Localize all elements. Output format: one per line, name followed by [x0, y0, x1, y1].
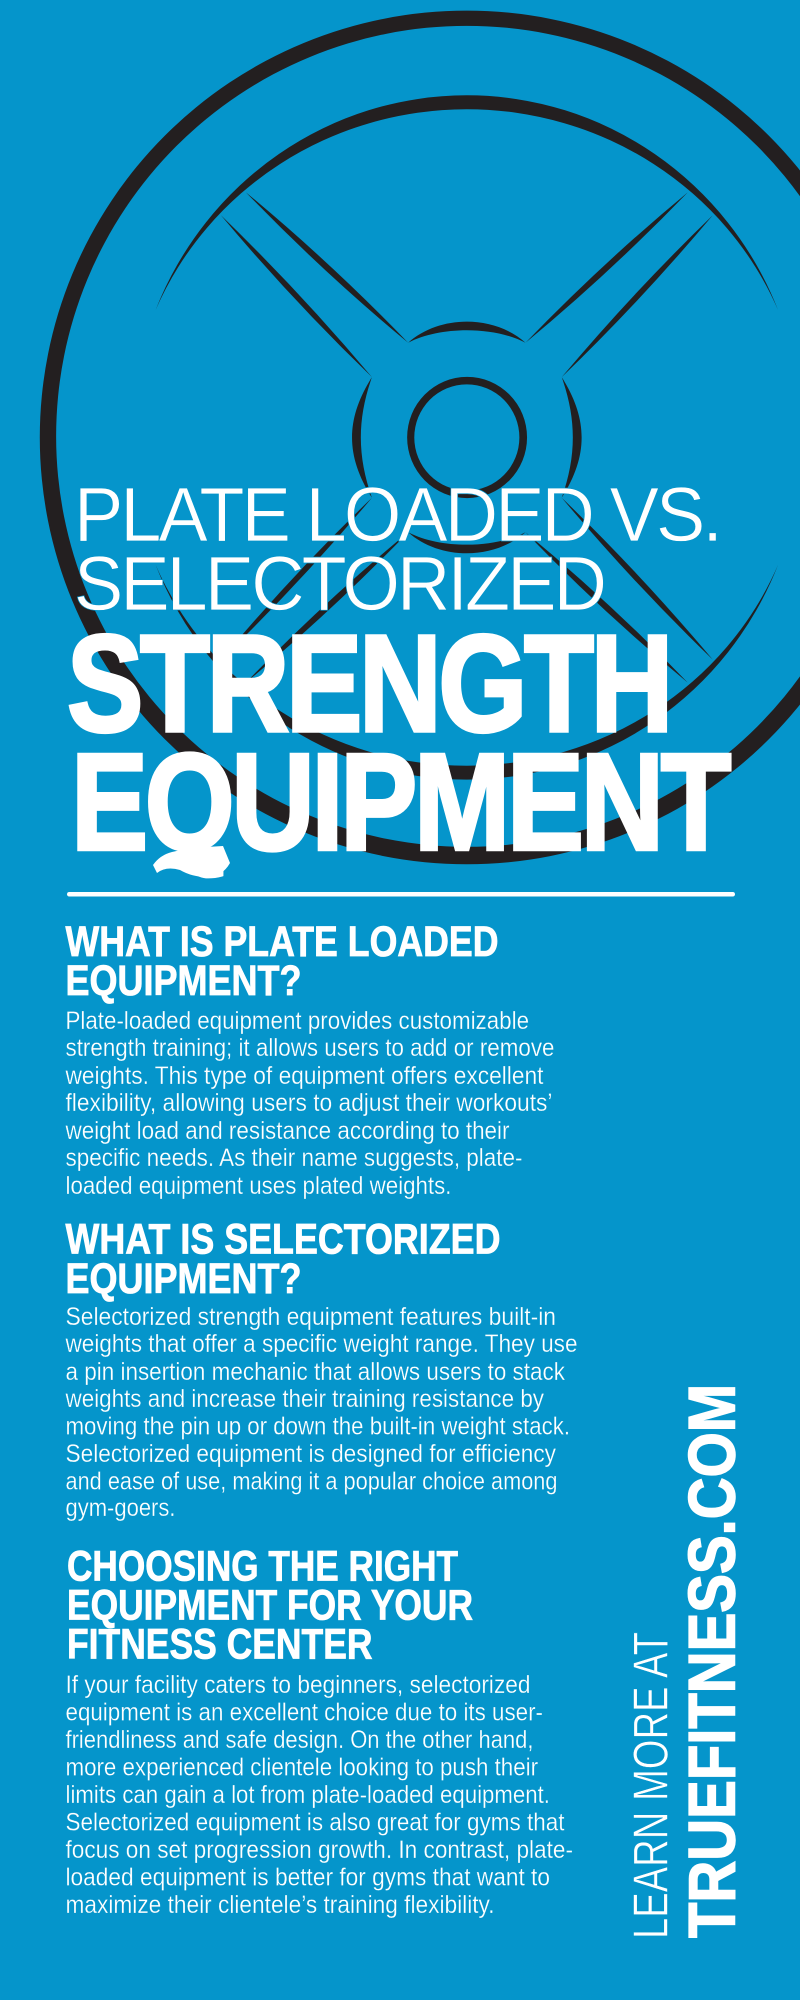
- body text: limits can gain a lot from plate-loaded equipment.: [66, 1781, 550, 1809]
- heading: EQUIPMENT?: [66, 1255, 302, 1303]
- body text: [65, 1303, 577, 1522]
- icon: weight plate illustration: [40, 11, 800, 864]
- body text: more experienced clientele looking to push their: [66, 1754, 538, 1782]
- section: what is plate loaded equipment: [65, 918, 554, 1200]
- body text: weights. This type of equipment offers excellent: [65, 1062, 544, 1090]
- heading: WHAT IS PLATE LOADED: [66, 918, 498, 966]
- body text: and ease of use, making it a popular choice among: [66, 1468, 558, 1496]
- body text: Selectorized equipment is designed for efficiency: [66, 1440, 556, 1468]
- hub arcs: [352, 322, 582, 553]
- hub centre ring: [407, 377, 527, 498]
- spokes: [221, 192, 713, 683]
- body text: weight load and resistance according to their: [65, 1117, 510, 1145]
- heading: FITNESS CENTER: [67, 1620, 372, 1668]
- body text: maximize their clientele’s training flexibility.: [66, 1891, 494, 1919]
- body text: [66, 1671, 573, 1919]
- title line: strength equipment: STRENGTH: [67, 607, 670, 761]
- body text: strength training; it allows users to add or remove: [66, 1034, 554, 1062]
- section: choosing the right equipment: [66, 1542, 573, 1919]
- outer plate rim: [40, 11, 800, 864]
- body text: focus on set progression growth. In contrast, plate-: [66, 1836, 573, 1864]
- body text: gym-goers.: [66, 1494, 176, 1522]
- body text: Selectorized equipment is also great for gyms that: [66, 1808, 565, 1836]
- body text: flexibility, allowing users to adjust their workouts’: [66, 1089, 552, 1117]
- title line: strength equipment: [67, 607, 730, 880]
- title line: plate loaded vs. selectorized: PLATE LOADED VS.: [74, 472, 720, 558]
- truefitness.com: TRUEFITNESS.COM: [674, 1384, 748, 1938]
- body text: loaded equipment is better for gyms that want to: [66, 1864, 550, 1892]
- body text: If your facility caters to beginners, selectorized: [66, 1671, 530, 1699]
- heading: WHAT IS SELECTORIZED: [66, 1216, 500, 1264]
- heading: [66, 918, 498, 1005]
- heading: EQUIPMENT FOR YOUR: [67, 1582, 473, 1630]
- body text: Plate-loaded equipment provides customizable: [66, 1007, 529, 1035]
- vertical call to action: [624, 1384, 748, 1939]
- heading: [66, 1216, 500, 1303]
- body text: a pin insertion mechanic that allows users to stack: [66, 1358, 565, 1386]
- inner ring top arc: [156, 95, 778, 310]
- body text: Selectorized strength equipment features built-in: [66, 1303, 556, 1331]
- section: what is selectorized equipment: [65, 1216, 577, 1522]
- title line: plate loaded vs. selectorized: [74, 472, 720, 627]
- title: [67, 472, 730, 880]
- inner ring bottom arc: [156, 565, 778, 780]
- heading: EQUIPMENT?: [66, 957, 302, 1005]
- body text: equipment is an excellent choice due to its user-: [66, 1698, 543, 1726]
- body text: specific needs. As their name suggests, plate-: [66, 1144, 522, 1172]
- body text: friendliness and safe design. On the other hand,: [66, 1726, 534, 1754]
- heading: CHOOSING THE RIGHT: [67, 1542, 458, 1590]
- divider: [67, 892, 735, 896]
- learn more at: LEARN MORE AT: [624, 1632, 678, 1939]
- body text: loaded equipment uses plated weights.: [66, 1172, 452, 1200]
- body text: weights and increase their training resistance by: [65, 1385, 544, 1413]
- body text: moving the pin up or down the built-in weight stack.: [66, 1412, 570, 1440]
- body text: [65, 1007, 554, 1200]
- title line: plate loaded vs. selectorized: SELECTORIZED: [74, 541, 604, 627]
- body text: weights that offer a specific weight range. They use: [65, 1330, 577, 1358]
- heading: [67, 1542, 473, 1668]
